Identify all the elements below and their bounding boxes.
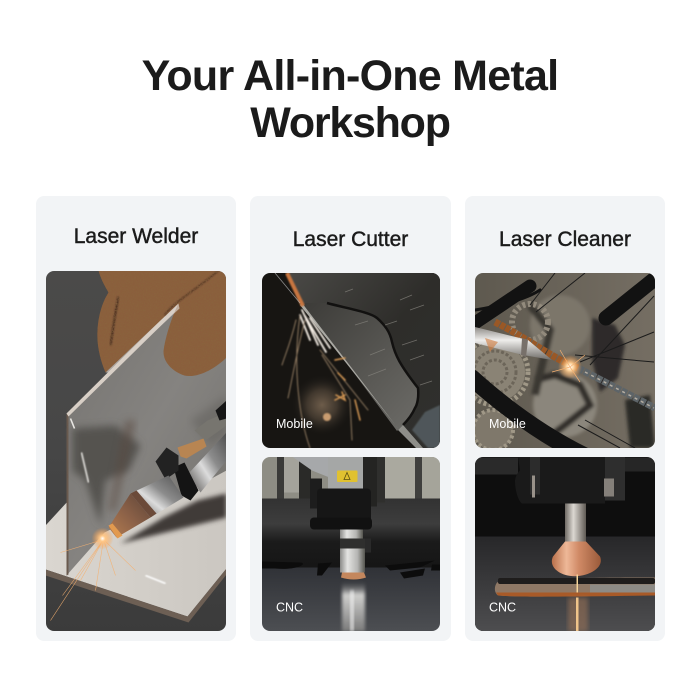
sparks — [282, 310, 368, 448]
glove — [97, 270, 226, 376]
welding torch — [108, 400, 226, 538]
heading: laser welder: Laser Welder — [74, 225, 198, 248]
label: CNC: CNC — [276, 600, 303, 614]
photo: laser welder torch on steel plate — [46, 271, 226, 631]
cassette gears — [462, 304, 548, 450]
upright plate — [66, 300, 226, 575]
panel: laser cleaner — [465, 196, 665, 641]
machine frame — [262, 456, 440, 570]
label: mobile: Mobile — [489, 417, 526, 431]
steel sheet — [475, 536, 655, 632]
photo: laser cutter CNC — [262, 457, 440, 631]
photo: laser cleaner CNC — [475, 457, 655, 631]
rusty chain — [495, 322, 655, 408]
photo: laser cleaner mobile, bike chain — [475, 273, 655, 448]
spokes — [530, 273, 654, 448]
steel sheet — [287, 273, 440, 448]
blurred wheel, rotor and cassette — [530, 295, 655, 448]
spark — [552, 350, 585, 382]
heading: laser cleaner: Laser Cleaner — [499, 228, 631, 251]
label: CNC: CNC — [489, 600, 516, 614]
photo: laser cutter mobile — [262, 273, 440, 448]
panel: laser cutter — [250, 196, 451, 641]
panel: laser welder — [36, 196, 236, 641]
title — [142, 52, 558, 146]
laser beam — [568, 574, 588, 631]
torch — [475, 327, 552, 360]
sparks — [50, 539, 135, 620]
rusty bar — [495, 577, 655, 596]
nozzle — [552, 503, 601, 576]
cutting head — [310, 488, 372, 579]
frame tubes — [472, 273, 662, 456]
steel sheet — [262, 560, 440, 632]
floor plate — [45, 440, 226, 622]
label: mobile: Mobile — [276, 417, 313, 431]
heading: laser cutter: Laser Cutter — [293, 228, 408, 251]
machine head — [515, 456, 625, 503]
warning label — [337, 470, 358, 482]
title: Your All-in-One Metal — [142, 52, 558, 100]
title: Workshop — [250, 98, 450, 146]
